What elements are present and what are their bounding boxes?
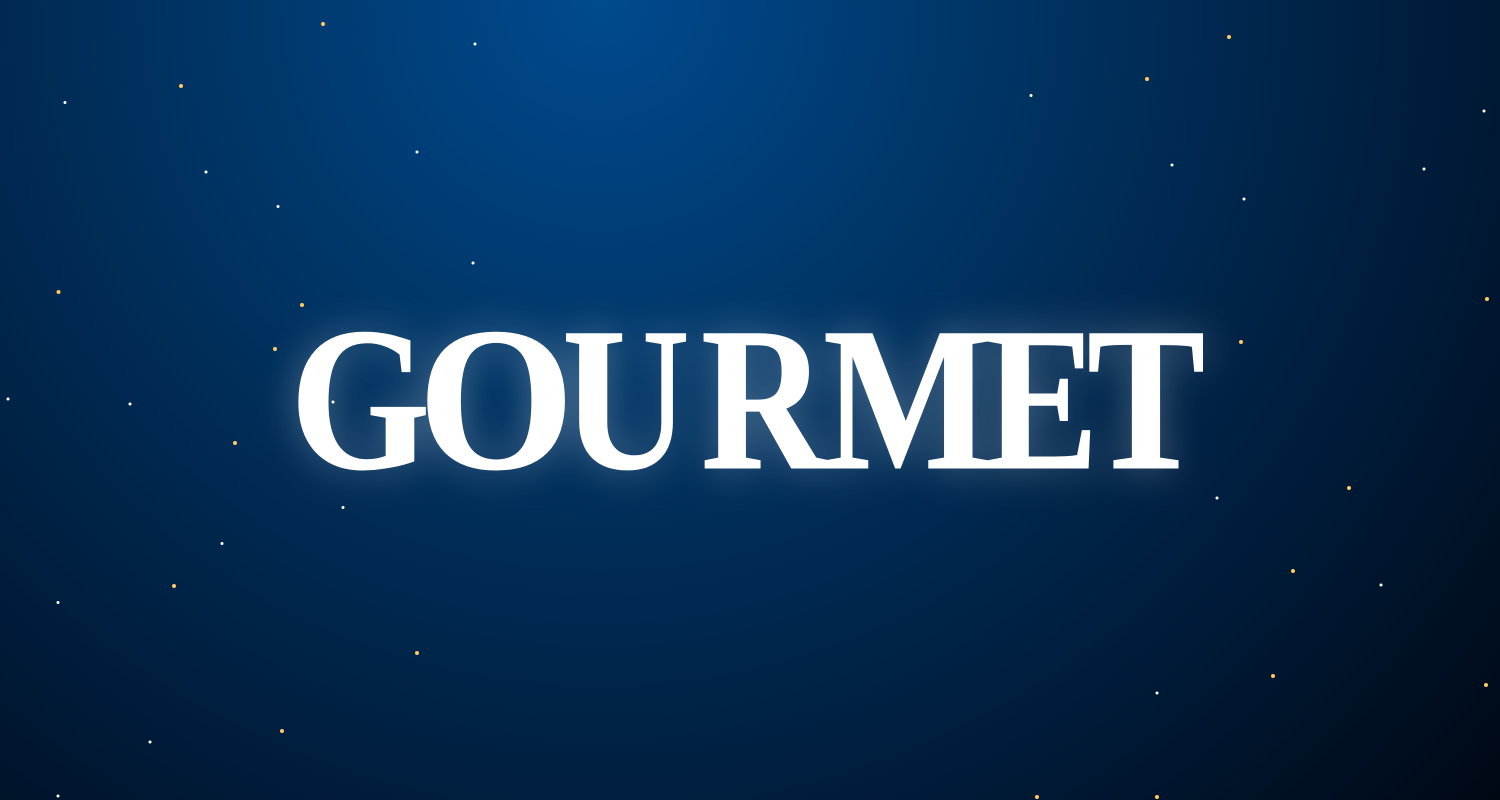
title: GOURMET: [290, 285, 1205, 513]
title: GOURMET: R: [701, 286, 829, 513]
title: GOURMET: G: [290, 285, 430, 513]
title: GOURMET: O: [418, 285, 574, 512]
title: GOURMET: E: [985, 285, 1098, 513]
title: GOURMET: U: [562, 286, 690, 513]
title: GOURMET: T: [1087, 286, 1205, 513]
title: GOURMET: M: [823, 285, 992, 513]
